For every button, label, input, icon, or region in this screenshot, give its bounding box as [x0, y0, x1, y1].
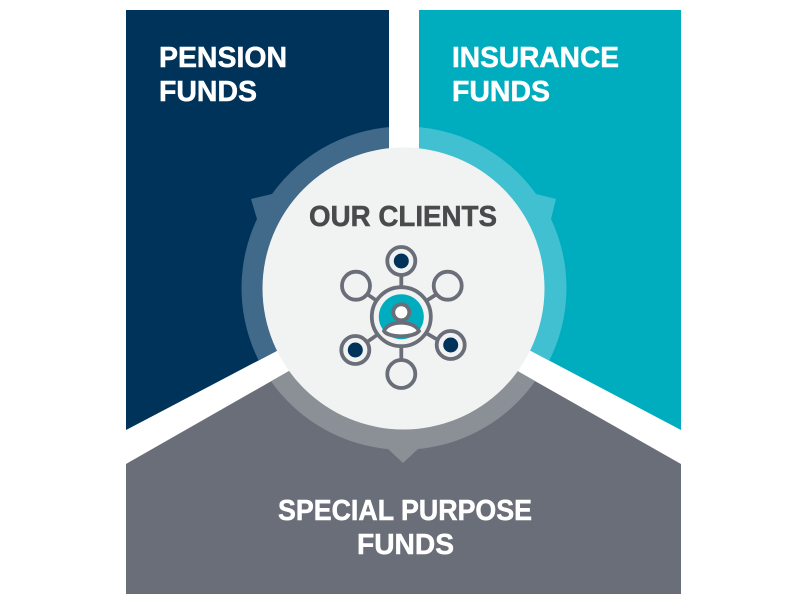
heading: special purpose funds: FUNDS: [357, 529, 454, 561]
infographic: our clients: [126, 10, 681, 594]
centre circle: [262, 148, 544, 430]
heading: our clients: OUR CLIENTS: [309, 201, 497, 233]
heading: insurance funds: INSURANCE: [452, 42, 619, 74]
heading: insurance funds: FUNDS: [452, 76, 550, 108]
ring segment: insurance: [419, 127, 566, 360]
heading: pension funds: PENSION: [159, 42, 287, 74]
panel: special purpose funds: [126, 371, 681, 594]
ring segment: special purpose: [271, 371, 535, 463]
panel: insurance funds: [419, 10, 681, 430]
panel: pension funds: [126, 10, 389, 430]
heading: pension funds: FUNDS: [159, 76, 257, 108]
icon: client network: [341, 247, 465, 388]
heading: special purpose funds: SPECIAL PURPOSE: [278, 495, 532, 527]
ring segment: pension: [242, 127, 389, 360]
